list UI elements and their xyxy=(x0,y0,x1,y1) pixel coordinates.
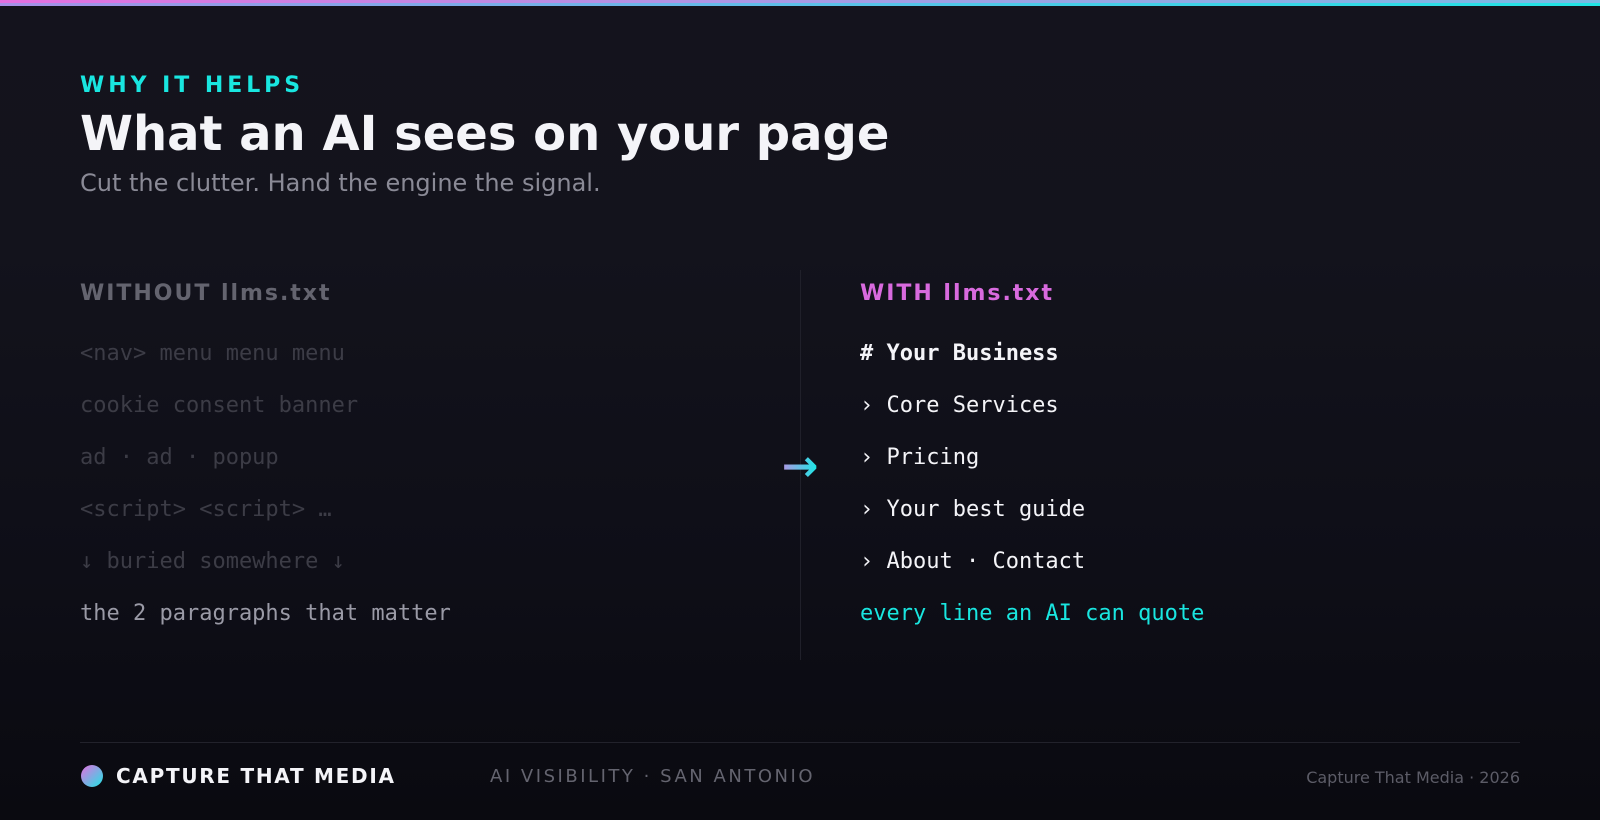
line: what matters: the 2 paragraphs that matter xyxy=(80,601,451,626)
brand name: CAPTURE THAT MEDIA xyxy=(116,764,396,788)
with heading: WITH llms.txt xyxy=(860,281,1054,306)
cluttered line: cookie: cookie consent banner xyxy=(80,393,358,418)
top gradient bar xyxy=(0,0,1600,6)
without heading: WITHOUT llms.txt xyxy=(80,281,331,306)
subtitle: Cut the clutter. Hand the engine the signal. xyxy=(80,169,601,197)
panel: with llms.txt xyxy=(860,281,1204,626)
cluttered line: scripts: <script> <script> … xyxy=(80,497,332,522)
cluttered line: buried: ↓ buried somewhere ↓ xyxy=(80,549,345,574)
tagline: AI VISIBILITY · SAN ANTONIO xyxy=(490,766,815,787)
arrow xyxy=(775,445,825,489)
clean line: about: › About · Contact xyxy=(860,549,1085,574)
icon: brand dot xyxy=(81,765,103,787)
clean line: guide: › Your best guide xyxy=(860,497,1085,522)
clean line: pricing: › Pricing xyxy=(860,445,979,470)
cluttered line: ads: ad · ad · popup xyxy=(80,445,279,470)
clean line: business: # Your Business xyxy=(860,341,1059,366)
copyright: Capture That Media · 2026 xyxy=(1306,768,1520,787)
clean line: core services: › Core Services xyxy=(860,393,1059,418)
line: quote: every line an AI can quote xyxy=(860,601,1204,626)
title: What an AI sees on your page xyxy=(80,106,889,162)
arrow: → xyxy=(782,441,818,492)
footer xyxy=(80,742,1520,820)
panel: without llms.txt xyxy=(80,281,451,626)
center divider xyxy=(800,270,801,660)
cluttered line: nav: <nav> menu menu menu xyxy=(80,341,345,366)
eyebrow: why it helps: WHY IT HELPS xyxy=(80,73,304,98)
